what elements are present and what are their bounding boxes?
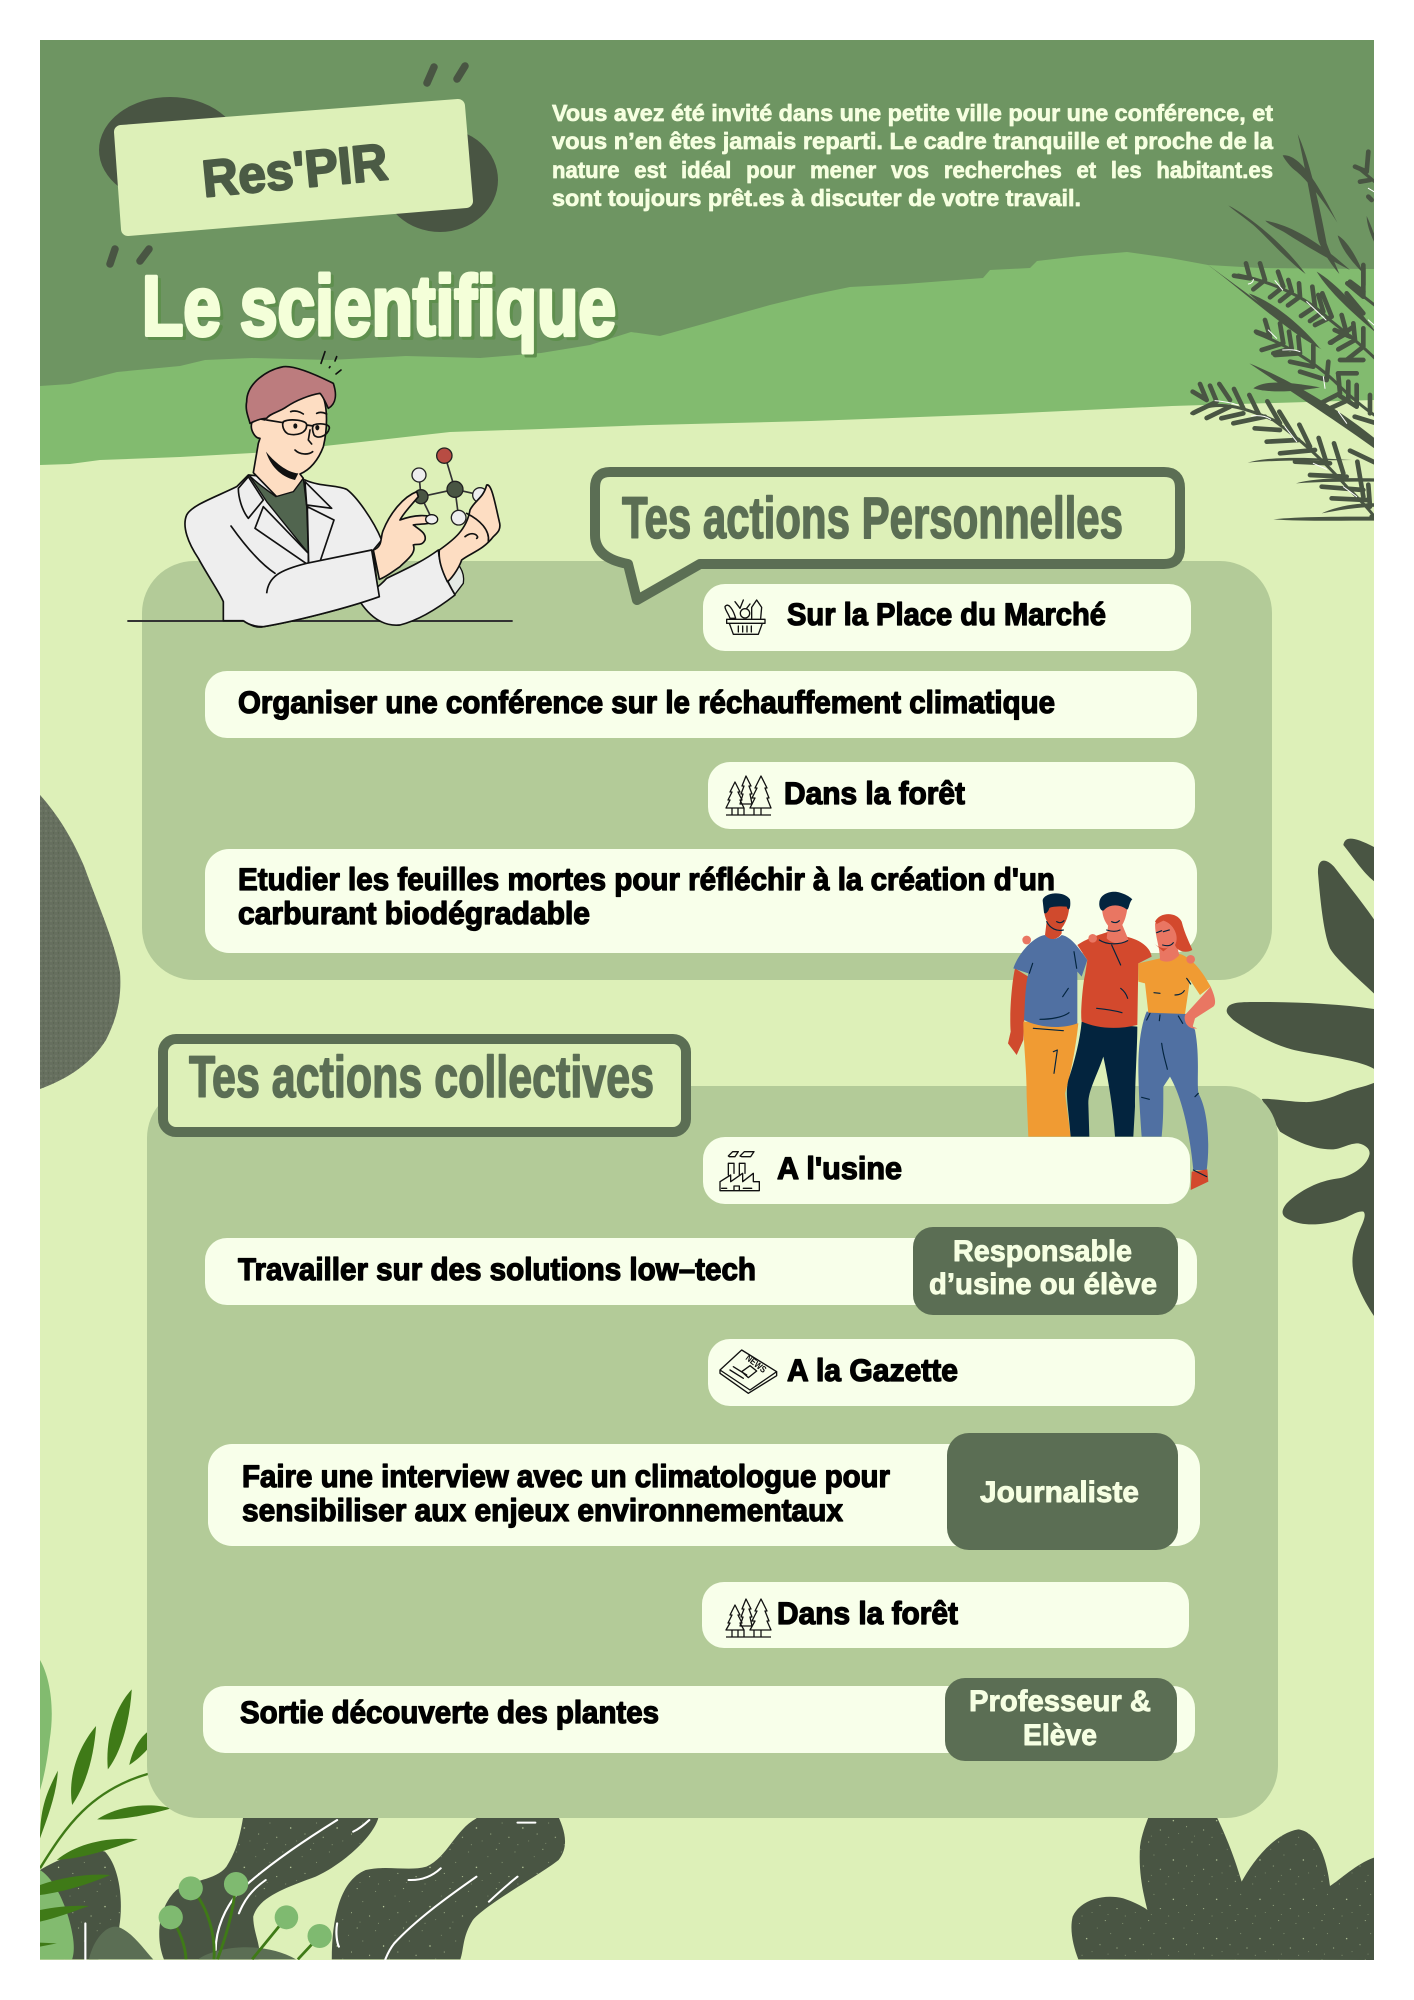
pill: Dans la forêt (personnel): Dans la forêt [784, 775, 965, 811]
tag: Responsable d'usine ou élève [913, 1227, 1178, 1315]
pill: Faire une interview: sensibiliser aux enjeux environnementaux [242, 1492, 843, 1528]
pill: Sur la Place du Marché [703, 584, 1191, 651]
title: Le scientifique [145, 262, 619, 356]
icon: newspaper [720, 1350, 777, 1393]
pill: Sortie découverte: Sortie découverte des plantes [240, 1694, 659, 1730]
heading box: Tes actions collectives: Tes actions collectives [189, 1045, 654, 1110]
tag: Journaliste [947, 1433, 1178, 1550]
intro paragraph [552, 100, 1273, 211]
pill: A l'usine: A l'usine [777, 1150, 902, 1186]
panel: actions personnelles [142, 561, 1272, 980]
pill: Sur la Place du Marché: Sur la Place du Marché [787, 596, 1106, 632]
ticks above head [321, 352, 341, 374]
heading text: Tes actions Personnelles [622, 486, 1123, 551]
coat [185, 475, 382, 627]
badge: Res'PIR [99, 66, 498, 264]
man left [1008, 893, 1087, 1137]
leaf: pale green left [40, 1660, 52, 1790]
badge text: Res'PIR [200, 133, 390, 209]
intro paragraph: sont toujours prêt.es à discuter de votre travail. [552, 185, 1081, 211]
heading box: Tes actions collectives [163, 1039, 686, 1132]
title: Le scientifique [142, 259, 616, 353]
pill: Faire une interview: Faire une interview avec un climatologue pour [242, 1458, 890, 1494]
intro paragraph: Vous avez été invité dans une petite ville pour une conférence, et [552, 100, 1273, 126]
molecule [412, 448, 487, 518]
torn paper band: mid green [40, 252, 1374, 465]
heading bubble: Tes actions Personnelles [595, 472, 1180, 600]
desk line [127, 618, 513, 624]
neck and face [251, 393, 327, 497]
decor: left grey leaf [40, 795, 120, 1089]
icon: market basket [725, 600, 765, 634]
mounds: grey green [89, 1927, 153, 1959]
illustration: scientist [127, 352, 513, 627]
forearm sleeve [243, 550, 379, 627]
decor: rosemary plant top right [1192, 134, 1377, 521]
intro paragraph: nature est idéal pour mener vos recherches et les habitant.es [552, 157, 1273, 183]
tag: Professeur & Elève: Professeur & [969, 1685, 1151, 1718]
pill: Etudier les feuilles mortes [205, 849, 1197, 953]
pill: Faire une interview [208, 1433, 1200, 1550]
leaf: mid green bottom left [40, 1870, 74, 1959]
pill: Dans la forêt (collectif): Dans la forêt [777, 1595, 958, 1631]
header band: dark green [40, 40, 1374, 386]
panel: actions collectives [147, 1086, 1278, 1818]
decor: right leaves [1227, 839, 1377, 1320]
pill: Sortie découverte [203, 1678, 1195, 1761]
pill: Travailler low-tech: Travailler sur des solutions low–tech [238, 1251, 756, 1287]
pill: Travailler low-tech [205, 1227, 1197, 1315]
glasses and face details [267, 411, 329, 454]
tag: Professeur & Elève: Elève [1023, 1719, 1097, 1752]
icon: newspaper: NEWS [744, 1353, 768, 1375]
pill: Dans la forêt (personnel) [708, 762, 1195, 829]
fern leaves [40, 1689, 171, 1947]
decor: plants bottom left [40, 1660, 565, 1959]
intro paragraph: vous n’en êtes jamais reparti. Le cadre tranquille et proche de la [552, 128, 1273, 154]
icon: factory [720, 1152, 759, 1191]
decor: dark plant bottom right [1071, 1813, 1375, 1960]
tag: Professeur & Elève [945, 1678, 1177, 1761]
pill: Organiser une conférence: Organiser une conférence sur le réchauffement climatique [238, 684, 1055, 720]
pill: Etudier les feuilles mortes: Etudier les feuilles mortes pour réfléchir à la création d'un [238, 861, 1055, 897]
icon: trees [726, 776, 771, 815]
dark blobs behind badge [99, 97, 241, 203]
hand left [373, 492, 435, 579]
shirt [249, 475, 308, 553]
icon: trees [726, 1599, 771, 1637]
man middle [1067, 892, 1152, 1137]
hand right [439, 485, 500, 582]
sleeve right [360, 550, 455, 625]
pill: Etudier les feuilles mortes: carburant biodégradable [238, 895, 590, 931]
hair [246, 367, 335, 423]
pill: A la Gazette: A la Gazette [787, 1352, 958, 1388]
badge plate [121, 106, 466, 229]
lapels [238, 477, 263, 518]
chin shadow [266, 452, 298, 480]
tag: Responsable d'usine ou élève: d’usine ou élève [929, 1268, 1157, 1301]
tag: Journaliste: Journaliste [980, 1476, 1139, 1509]
pill: Organiser une conférence [205, 671, 1197, 738]
illustration: group of three people [1008, 892, 1215, 1190]
pill: A la Gazette [708, 1339, 1195, 1406]
pill: A l'usine [703, 1137, 1190, 1204]
tick marks [110, 66, 465, 264]
buds with stems [176, 1896, 312, 1960]
pill: Dans la forêt (collectif) [702, 1582, 1189, 1648]
tag: Responsable d'usine ou élève: Responsable [953, 1235, 1132, 1268]
woman [1138, 914, 1215, 1190]
bubble [595, 472, 1180, 600]
